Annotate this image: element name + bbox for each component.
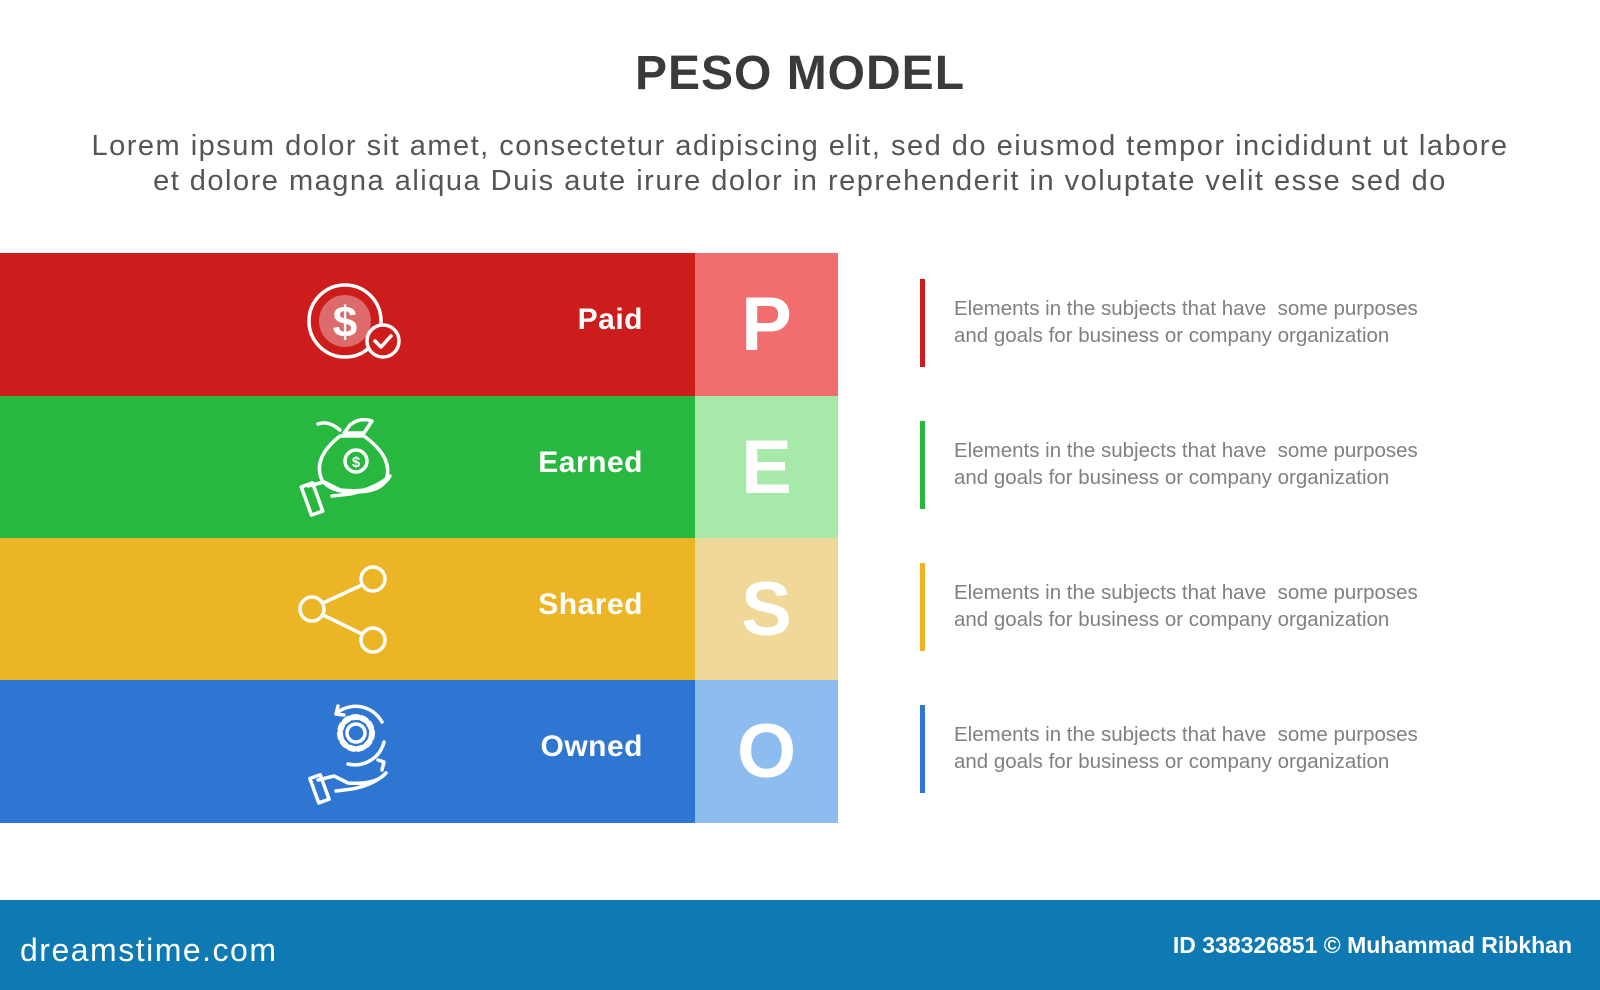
description 2: and goals for business or company organization	[954, 466, 1389, 489]
description 3: Elements in the subjects that have some purposes	[954, 581, 1418, 604]
description 1	[920, 279, 1418, 367]
icon: paid dollar: $	[333, 298, 357, 347]
description 2: Elements in the subjects that have some purposes	[954, 439, 1418, 462]
letter S	[695, 538, 838, 681]
panel: paid bar	[0, 253, 695, 396]
subtitle: et dolore magna aliqua Duis aute irure dolor in reprehenderit in voluptate velit esse sed do	[153, 165, 1447, 197]
panel: shared bar: Shared	[538, 588, 643, 621]
letter P: P	[741, 282, 792, 367]
letter O	[695, 680, 838, 823]
letter S: S	[741, 567, 792, 652]
letter E: E	[741, 425, 792, 510]
panel: paid bar: Paid	[578, 303, 643, 336]
panel: owned bar: Owned	[540, 730, 643, 763]
icon: earned money bag	[301, 420, 390, 515]
subtitle	[91, 130, 1509, 197]
icons	[298, 283, 401, 805]
description 3: and goals for business or company organization	[954, 608, 1389, 631]
description 4	[920, 705, 1418, 793]
icon: paid dollar	[309, 285, 399, 357]
letter E	[695, 396, 838, 539]
icon: earned money bag: $	[352, 454, 361, 471]
panel: earned bar: Earned	[538, 446, 643, 479]
description 1: and goals for business or company organization	[954, 324, 1389, 347]
subtitle: Lorem ipsum dolor sit amet, consectetur adipiscing elit, sed do eiusmod tempor incididunt ut labore	[91, 130, 1509, 162]
description 2	[920, 421, 1418, 509]
panel: owned bar	[0, 680, 695, 823]
footer credit: ID 338326851 © Muhammad Ribkhan	[1173, 932, 1572, 958]
description 1: Elements in the subjects that have some purposes	[954, 297, 1418, 320]
footer brand: dreamstime.com	[20, 932, 278, 968]
description 4: Elements in the subjects that have some purposes	[954, 723, 1418, 746]
footer	[0, 900, 1600, 990]
letter P	[695, 253, 838, 396]
letter O: O	[737, 709, 796, 794]
panel: shared bar	[0, 538, 695, 681]
description 3	[920, 563, 1418, 651]
title: PESO MODEL	[635, 47, 965, 100]
description 4: and goals for business or company organization	[954, 750, 1389, 773]
panel: earned bar	[0, 396, 695, 539]
icon: owned gear hand	[310, 706, 386, 803]
icon: shared	[300, 567, 385, 652]
